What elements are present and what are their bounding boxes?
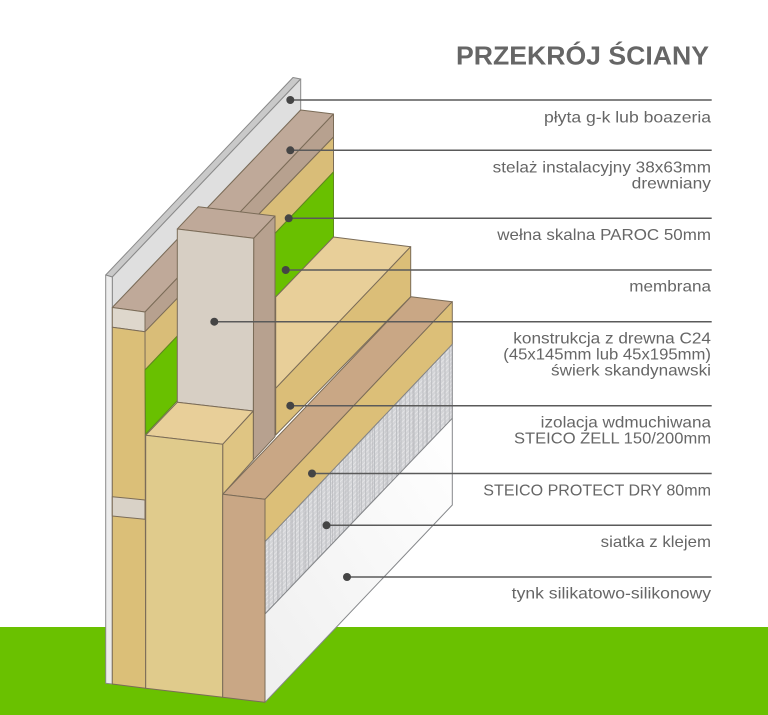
callout: rock wool	[285, 214, 712, 244]
plaster layer	[265, 418, 452, 702]
callout: plaster: tynk silikatowo-silikonowy	[512, 586, 711, 603]
callout: timber construction: konstrukcja z drewna C24	[513, 330, 711, 347]
callout: membrane	[282, 266, 712, 296]
callout: plasterboard	[286, 96, 712, 126]
blown insulation layer	[276, 237, 411, 435]
callout: timber construction	[210, 318, 712, 380]
protect dry layer	[223, 297, 452, 542]
callout: membrane: membrana	[629, 279, 711, 296]
callout: protect dry: STEICO PROTECT DRY 80mm	[483, 482, 711, 499]
callout: blown insulation: izolacja wdmuchiwana	[541, 414, 711, 431]
plasterboard layer	[106, 78, 301, 684]
callout: mesh with adhesive: siatka z klejem	[601, 534, 711, 551]
callout: installation frame: drewniany	[632, 176, 711, 192]
green ground	[0, 627, 768, 715]
membrane layer	[145, 172, 334, 434]
callout: timber construction: (45x145mm lub 45x195mm)	[503, 346, 711, 363]
callout: blown insulation	[286, 402, 712, 447]
callout: protect dry	[308, 470, 712, 499]
callout: plasterboard: płyta g-k lub boazeria	[544, 110, 711, 126]
timber stud	[177, 207, 275, 460]
callout: mesh with adhesive	[322, 521, 712, 551]
callout: blown insulation: STEICO ZELL 150/200mm	[514, 430, 711, 447]
callout: timber construction: świerk skandynawski	[551, 363, 711, 380]
mesh layer	[265, 344, 452, 614]
wall cross-section diagram	[106, 78, 452, 702]
front block	[146, 402, 265, 702]
callout: installation frame: stelaż instalacyjny 38x63mm	[493, 160, 711, 177]
rock wool layer	[112, 137, 334, 688]
installation batten layer	[112, 110, 334, 332]
callout: rock wool: wełna skalna PAROC 50mm	[496, 227, 711, 244]
title: PRZEKRÓJ ŚCIANY	[456, 40, 709, 70]
callout: plaster	[343, 573, 712, 603]
callout: installation frame	[286, 146, 712, 192]
